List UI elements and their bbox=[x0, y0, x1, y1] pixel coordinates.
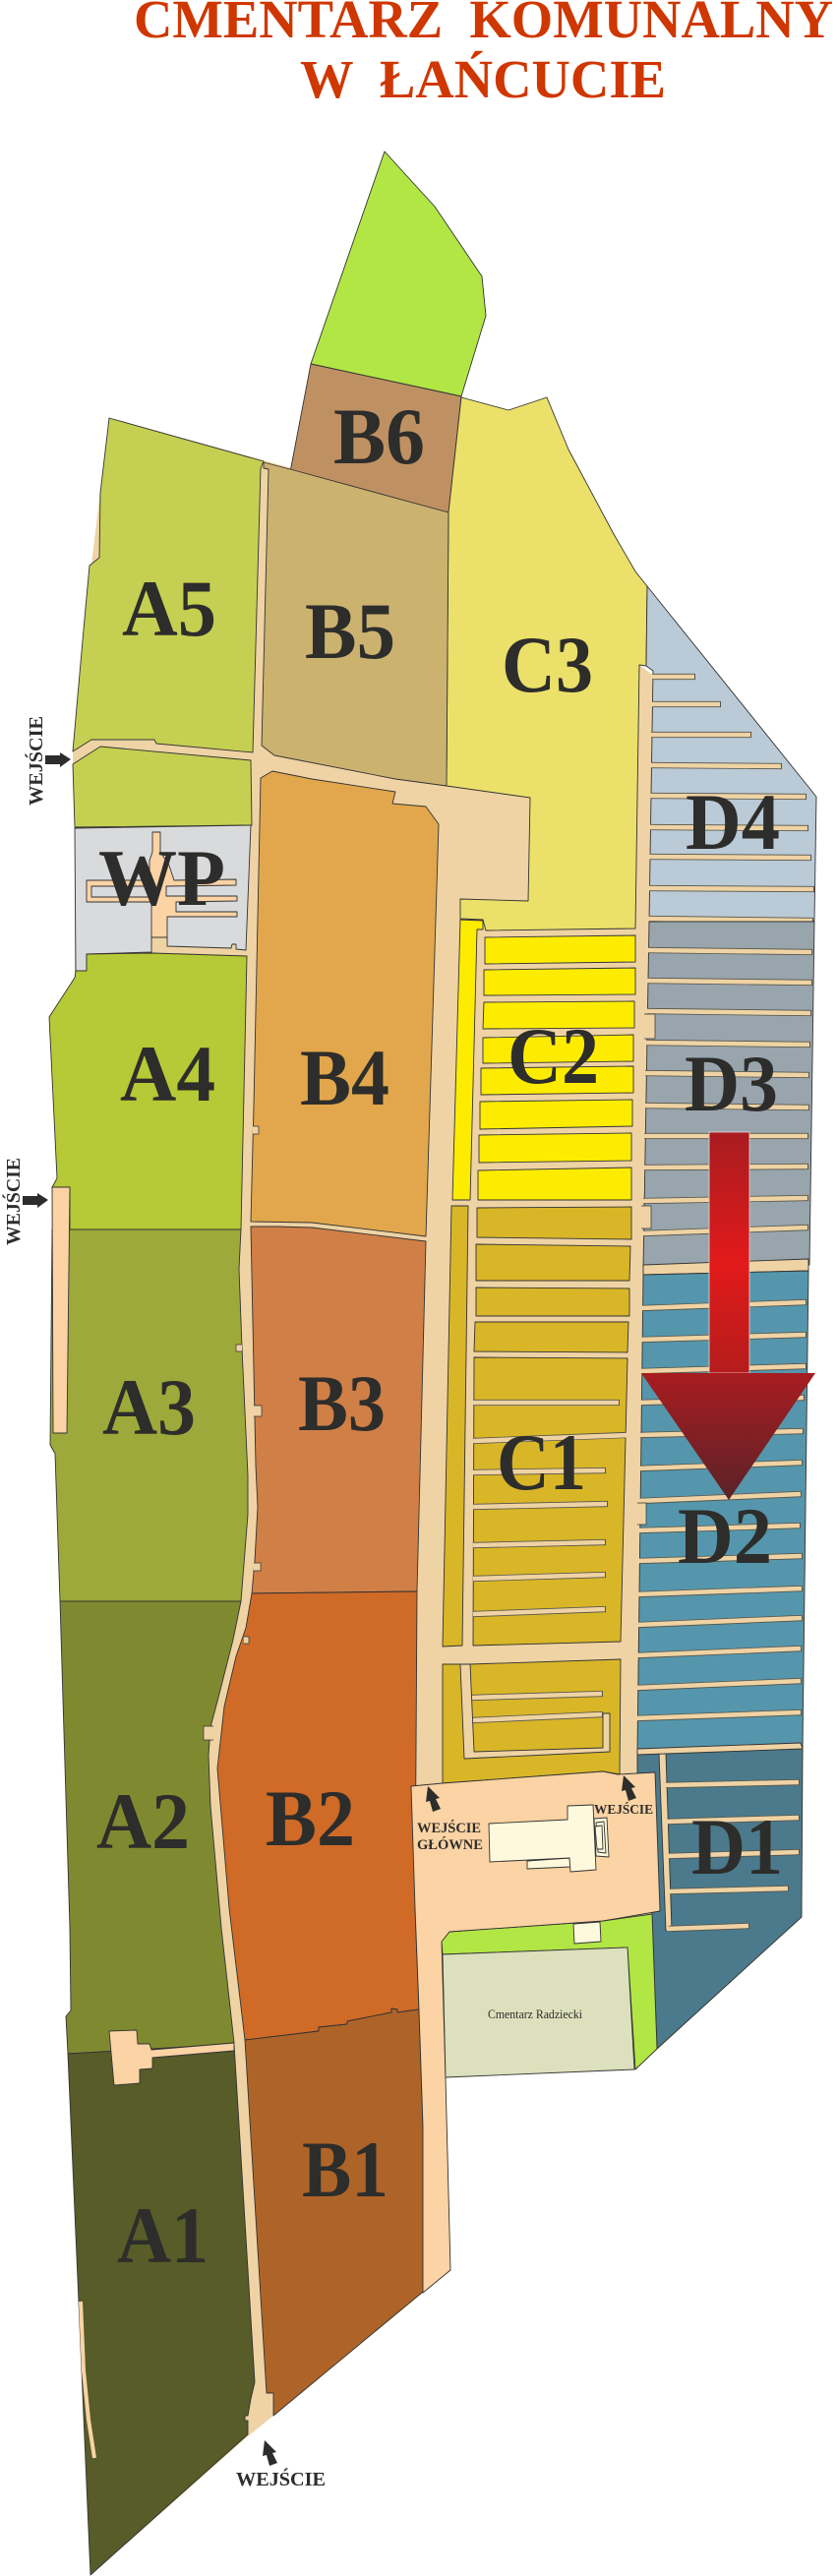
panel: section D3 bbox=[641, 922, 814, 1269]
icon: chapel building bbox=[489, 1805, 609, 1872]
panel: section C3 bbox=[447, 397, 647, 930]
panel: green area north bbox=[311, 151, 486, 396]
panel: section A2 bbox=[60, 1601, 241, 2054]
panel: section D1 bbox=[637, 1746, 803, 2049]
panel: Cmentarz Radziecki: Cmentarz Radziecki bbox=[488, 2007, 582, 2021]
panel: section B6: B6 bbox=[333, 391, 425, 481]
panel: section B6 bbox=[290, 364, 461, 512]
panel: road network base bbox=[49, 418, 816, 2575]
panel: section C2 bbox=[452, 920, 635, 1200]
panel: section B4: B4 bbox=[300, 1033, 389, 1122]
panel: section A2: A2 bbox=[96, 1776, 190, 1866]
panel: Cmentarz Radziecki bbox=[443, 1947, 634, 2077]
panel: section C1 bbox=[443, 1206, 631, 1783]
panel: section B2: B2 bbox=[266, 1773, 355, 1863]
panel: section D4 bbox=[646, 586, 816, 921]
panel: section A4 bbox=[49, 953, 247, 1229]
panel: section D4: D4 bbox=[686, 777, 780, 867]
panel: section B3: B3 bbox=[298, 1358, 386, 1448]
panel: section D2 bbox=[634, 1271, 808, 1752]
label: main entrance: WEJŚCIE bbox=[417, 1820, 481, 1836]
title bbox=[134, 0, 833, 109]
label: east entrance: WEJŚCIE bbox=[594, 1801, 653, 1818]
arrow: large red direction arrow bbox=[641, 1132, 815, 1500]
panel: entrance plaza and south avenue bbox=[411, 1771, 660, 2293]
panel: section B5: B5 bbox=[305, 586, 395, 676]
panel: green area by the main entrance bbox=[442, 1914, 657, 2069]
panel: section B2 bbox=[217, 1591, 419, 2040]
arrow: east entrance bbox=[622, 1775, 636, 1801]
road: path in A1 bbox=[81, 2302, 94, 2458]
panel: section A3 bbox=[50, 1229, 248, 1601]
panel: section A4: A4 bbox=[120, 1029, 215, 1118]
panel: section A3: A3 bbox=[102, 1362, 196, 1452]
panel: section A1: A1 bbox=[117, 2190, 209, 2280]
panel: section C2: C2 bbox=[508, 1011, 599, 1101]
panel: section A1 bbox=[68, 2044, 255, 2575]
label: main entrance bbox=[417, 1820, 483, 1853]
arrow: north-west entrance bbox=[45, 752, 71, 767]
label: north-west entrance: WEJŚCIE bbox=[24, 716, 47, 806]
road: D1/D2 boundary strip bbox=[637, 1743, 803, 1755]
label: south entrance: WEJŚCIE bbox=[236, 2467, 326, 2490]
road: notches along the C/D avenue bbox=[637, 1014, 655, 1525]
small building by lawn bbox=[573, 1922, 601, 1944]
label: west entrance: WEJŚCIE bbox=[1, 1158, 25, 1245]
road: small side notches along the A/B avenue bbox=[204, 1126, 262, 1740]
panel: section D2: D2 bbox=[678, 1491, 772, 1581]
panel: section WP bbox=[75, 825, 251, 971]
panel: section B1: B1 bbox=[302, 2125, 389, 2214]
panel: section D1: D1 bbox=[691, 1802, 783, 1891]
road: spur between A1 and A2 bbox=[109, 2030, 234, 2085]
arrow: south entrance bbox=[263, 2440, 277, 2466]
panel: section A5: A5 bbox=[122, 564, 216, 653]
label: main entrance: GŁÓWNE bbox=[417, 1836, 483, 1853]
panel: section C1: C1 bbox=[497, 1417, 586, 1507]
arrow: west entrance bbox=[23, 1193, 48, 1208]
panel: section B1 bbox=[245, 2008, 423, 2416]
title: W ŁAŃCUCIE bbox=[300, 49, 666, 109]
panel: section B3 bbox=[251, 1227, 426, 1593]
panel: section B4 bbox=[251, 771, 439, 1236]
road: west side path bbox=[52, 1187, 70, 1433]
panel: section WP: WP bbox=[98, 833, 225, 923]
panel: section A5 bbox=[73, 418, 264, 827]
panel: section D3: D3 bbox=[685, 1039, 778, 1128]
arrow: main entrance bbox=[426, 1786, 441, 1812]
panel: section B5 bbox=[262, 462, 448, 786]
panel: section C3: C3 bbox=[502, 620, 593, 709]
road: D3/D2 boundary strip bbox=[643, 1259, 808, 1275]
